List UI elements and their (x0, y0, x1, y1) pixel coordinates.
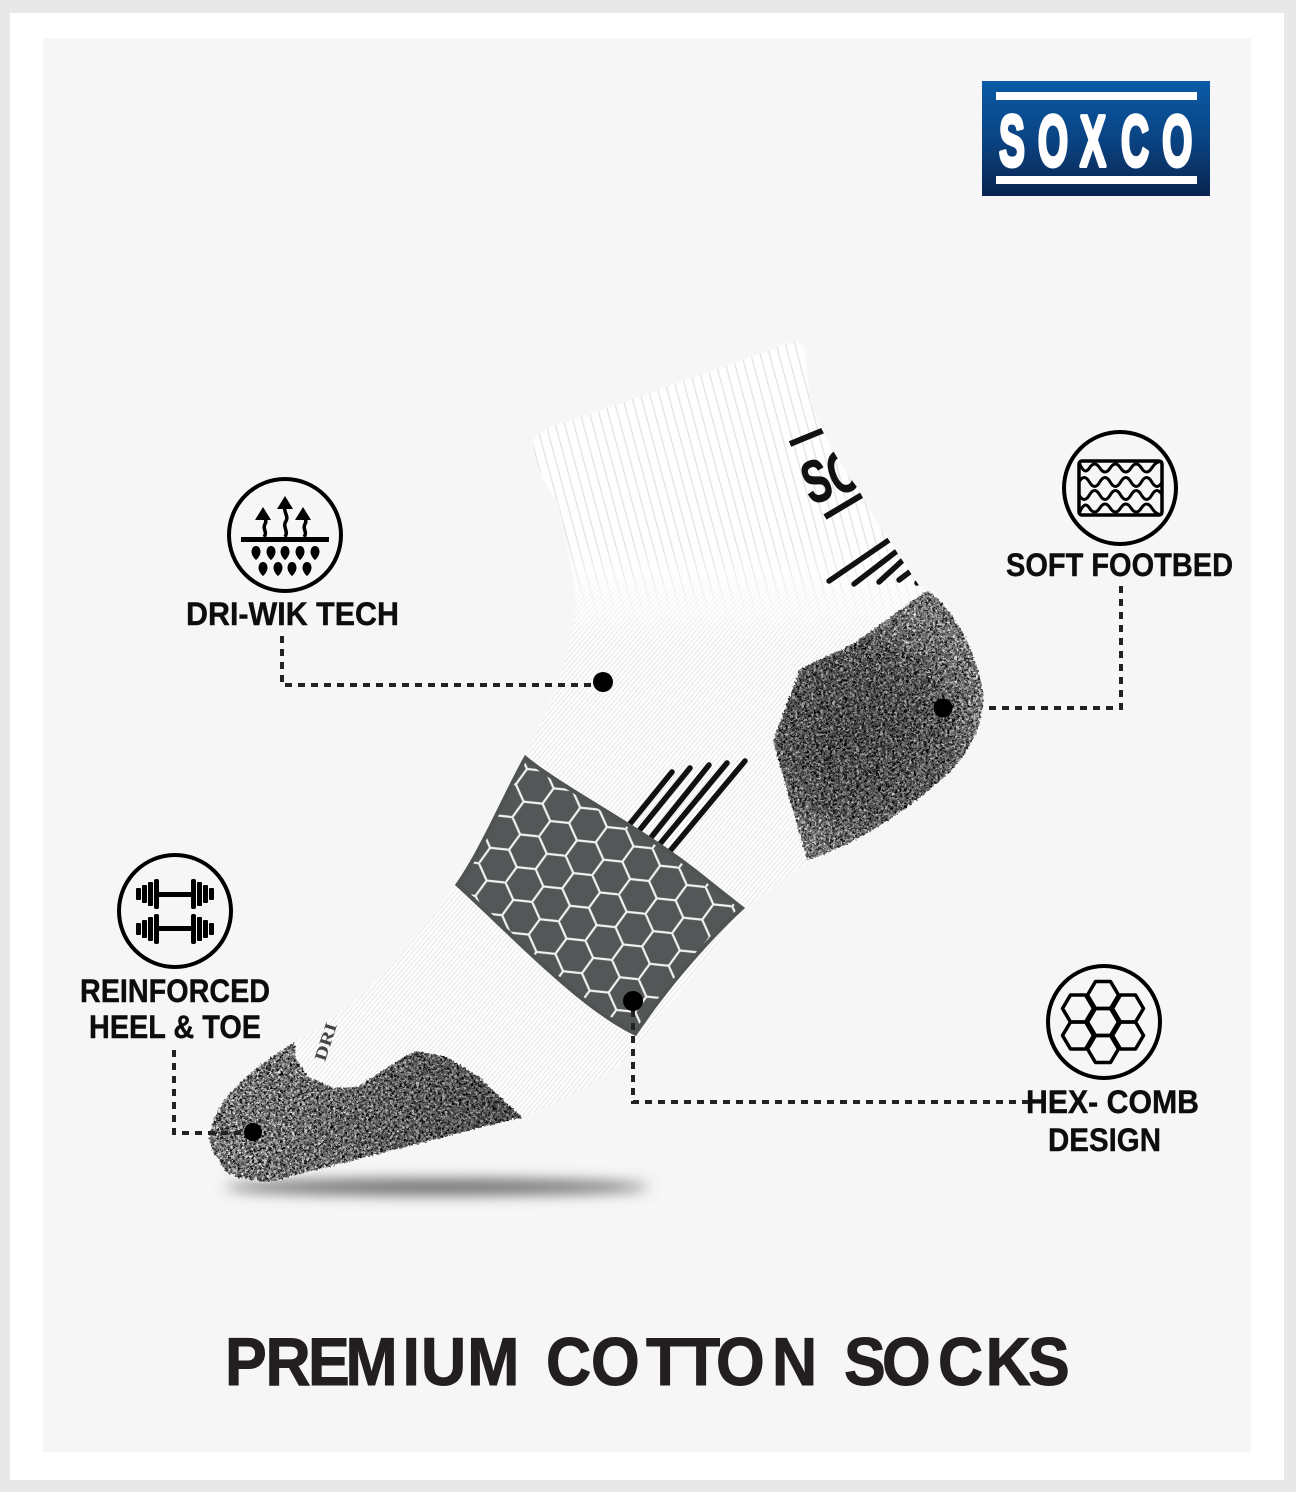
leader line (174, 1050, 246, 1133)
marker dot (244, 1123, 262, 1141)
label: soft footbed: SOFT FOOTBED (1006, 547, 1233, 583)
callout: hex-comb design (623, 966, 1199, 1158)
logo: SOXCO: SOXCO (999, 103, 1192, 182)
callout: dri-wik tech (186, 479, 613, 692)
foot twill texture (210, 595, 984, 1182)
toe patch (208, 1042, 522, 1182)
label: dri-wik tech: DRI-WIK TECH (186, 596, 399, 632)
heel patch (772, 590, 984, 860)
title: COTTON (546, 1324, 817, 1400)
sock logo mark: SOX (792, 425, 894, 517)
leader line (282, 636, 597, 685)
hex-comb band (455, 755, 745, 1036)
sock logo mark (788, 428, 863, 520)
marker dot (623, 991, 643, 1011)
title: SOCKS (844, 1324, 1070, 1400)
callout: soft footbed (934, 432, 1233, 718)
leader line (985, 586, 1121, 708)
label: hex-comb design: HEX- COMB (1026, 1084, 1199, 1120)
title (225, 1324, 1070, 1400)
title: PREMIUM (225, 1324, 519, 1400)
lower stripes (629, 761, 745, 851)
label: hex-comb design: DESIGN (1048, 1122, 1161, 1158)
upper stripes (829, 540, 920, 584)
sock body (209, 342, 983, 1182)
leader line (633, 1010, 1028, 1102)
toe print: DRI (312, 1021, 341, 1063)
label: reinforced heel and toe: HEEL & TOE (89, 1009, 261, 1045)
callout: reinforced heel and toe (80, 855, 270, 1141)
icon: footbed (1064, 432, 1176, 544)
icon: honeycomb (1048, 966, 1160, 1078)
marker dot (593, 672, 613, 692)
sock illustration (200, 330, 1000, 1200)
marker dot (934, 698, 952, 718)
icon: dumbbells (119, 855, 231, 967)
label: hex-comb design (1026, 1084, 1199, 1158)
label: reinforced heel and toe: REINFORCED (80, 973, 270, 1009)
sock shadow (225, 1179, 649, 1195)
logo: SOXCO (982, 81, 1210, 196)
cuff ribbing (533, 342, 938, 598)
label: reinforced heel and toe (80, 973, 270, 1045)
icon: moisture wicking (229, 479, 341, 591)
